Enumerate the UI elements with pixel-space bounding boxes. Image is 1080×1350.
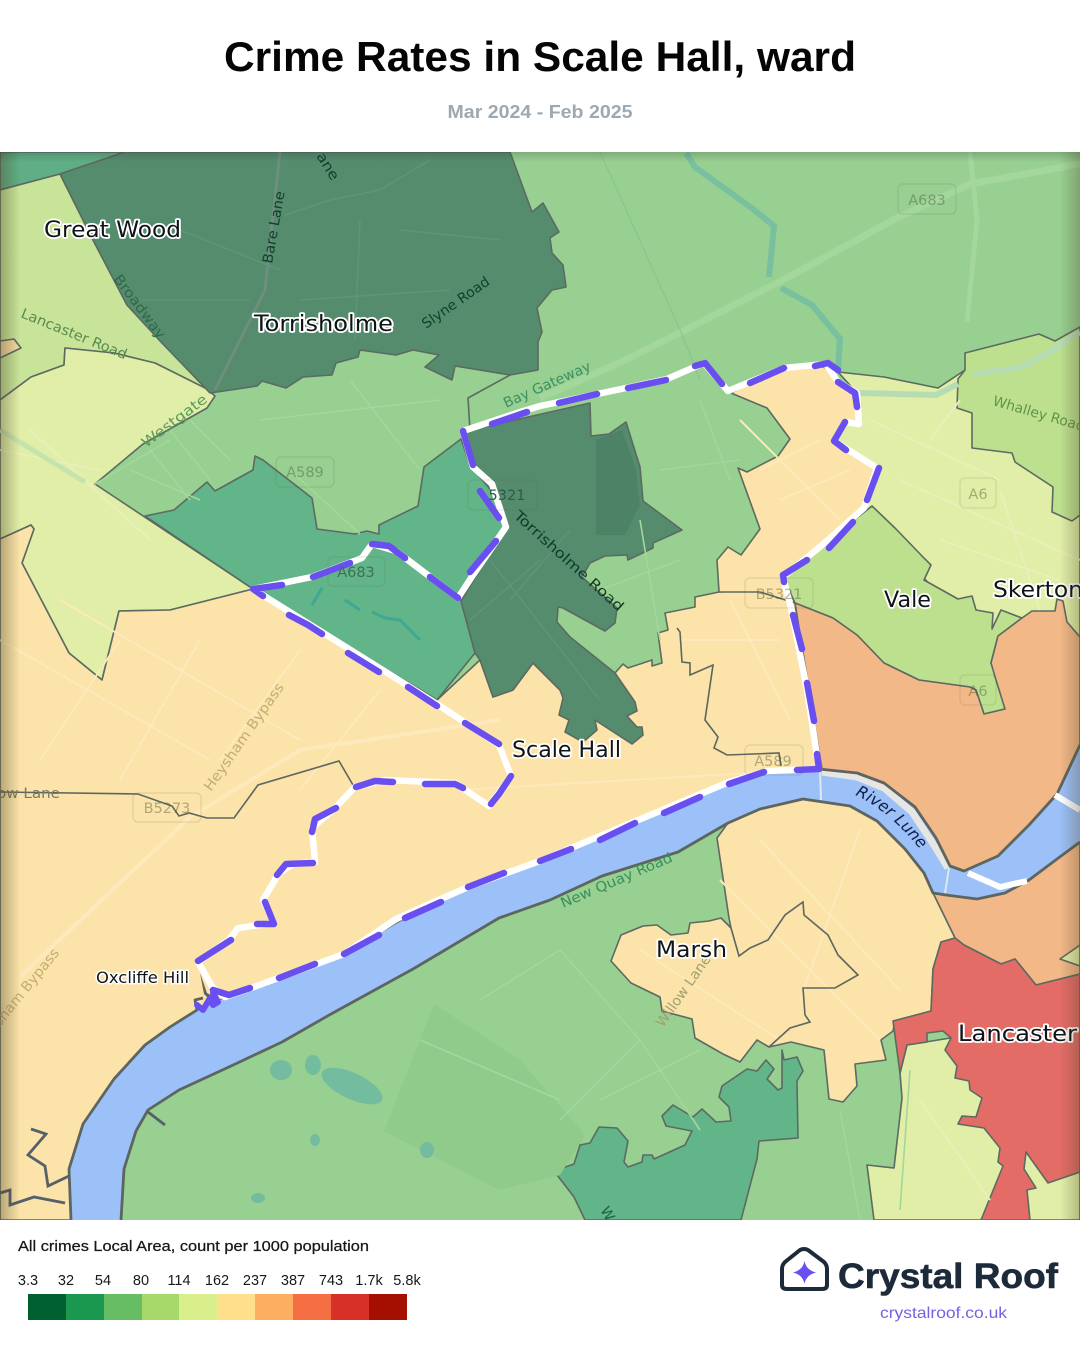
road badges: A683 [908,193,946,209]
area: darker patch on south green [553,1166,566,1176]
area: Great Wood light green [0,174,207,400]
road badges: A6 [968,684,988,700]
road badges [133,184,996,822]
place labels: Scale Hall [512,738,621,763]
area: Torrisholme dark green [60,152,566,393]
road labels: Lancaster Road [19,306,129,363]
area: ward west medium green [145,439,508,700]
river east white strips [968,795,1080,887]
road badges: B5273 [144,801,190,817]
area: central dark green (Torrisholme Road) [461,403,682,744]
legend scale labels: 3.3 [18,1273,38,1289]
road labels: Broadway [110,272,168,342]
legend colour bar [28,1294,407,1320]
place labels: Torrisholme [253,312,393,337]
road labels: ane [313,150,342,184]
streams in ward green [312,588,420,640]
tidal creeks south-west [0,1112,165,1205]
ward boundary: purple dashes [198,363,879,995]
Marsh sub-boundaries [731,902,858,1047]
place labels: Great Wood [44,218,181,243]
central tan sub-boundaries [677,628,781,766]
area: east pale yellow-green [834,370,1080,640]
legend scale labels: 162 [205,1273,229,1289]
road labels: Bay Gateway [501,359,594,412]
brand URL: crystalroof.co.uk [880,1305,1008,1322]
road labels: New Quay Road [558,850,675,912]
legend scale labels [18,1273,421,1289]
place labels: Oxcliffe Hill [96,968,189,987]
area: large tan north of river [0,525,819,1220]
area: southern pale yellow-green [867,1030,1080,1220]
ponds on south green [251,1055,434,1203]
area: orange south-east of river [933,842,1080,985]
railway at left edge [0,430,85,482]
legend scale labels: 80 [133,1273,149,1289]
road labels: Slyne Road [419,274,493,332]
area: Marsh tan south of river [611,799,955,1102]
place labels [44,218,1080,1047]
road badges: A589 [286,465,324,481]
map edge shading [0,152,1080,1220]
river bridge lines [820,770,949,893]
legend scale labels: 387 [281,1273,305,1289]
faint west boundary line [0,761,353,818]
road badges: A6 [968,487,988,503]
road labels: W [597,1204,617,1224]
road labels: Torrisholme Road [509,507,627,615]
area: small pale patch right edge [1060,945,1080,966]
subtitle: date range: Mar 2024 - Feb 2025 [448,101,632,122]
canal [686,153,840,370]
title: Crime Rates in Scale Hall, ward [224,33,856,80]
Oxcliffe inlet [200,973,220,1002]
area: west pale yellow-green [0,348,253,680]
ward boundary: white casing [198,363,877,997]
legend scale labels: 5.8k [393,1273,421,1289]
area: small tan patch at left edge [0,339,21,358]
area: orange north-east of river [795,599,1080,871]
road labels: Willow Lane [653,952,714,1030]
area: top-left medium green corner [0,152,125,190]
area: Lancaster red [893,938,1080,1220]
canal: east section [859,332,1080,395]
legend scale labels: 743 [319,1273,343,1289]
road badges: A683 [337,565,375,581]
river Lune [69,745,1080,1220]
brand name: Crystal Roof [838,1257,1058,1296]
river north-east walkway strip [822,772,948,868]
darker patch in central dark area [596,430,640,535]
panel: choropleth map [0,152,1080,1220]
road labels [0,150,1080,1224]
legend scale labels: 237 [243,1273,267,1289]
ward boundary: tangle at Oxcliffe Hill [197,993,218,1010]
road badges: B5321 [756,587,802,603]
place labels: Marsh [656,938,727,963]
roads: faint network on tan [0,420,900,1040]
area: north-east tan [717,365,879,603]
label: River Lune: River Lune [856,786,926,848]
legend scale labels: 54 [95,1273,111,1289]
legend title: All crimes Local Area, count per 1000 population [18,1239,369,1255]
legend scale labels: 114 [167,1273,191,1289]
road labels: Heysham Bypass [201,680,288,794]
icon: Crystal Roof house logo [782,1249,827,1289]
place labels: Vale [884,588,931,613]
area: Whalley Road light green [957,327,1080,521]
roads: faint network on green [95,152,1080,1220]
legend scale labels: 1.7k [355,1273,383,1289]
road labels: Westgate [139,391,211,451]
roads: faint network on dark green [140,152,600,700]
road badges: A589 [754,754,792,770]
river banks [69,745,1080,1220]
area: Vale light green [783,506,1022,714]
road labels: Bare Lane [260,190,289,265]
road badges: 5321 [489,488,525,504]
place labels: Lancaster [958,1022,1078,1047]
legend scale labels: 32 [58,1273,74,1289]
Bay Gateway boundary line [468,375,510,430]
area: south medium green [554,1050,803,1220]
place labels: Skerton [993,578,1080,603]
